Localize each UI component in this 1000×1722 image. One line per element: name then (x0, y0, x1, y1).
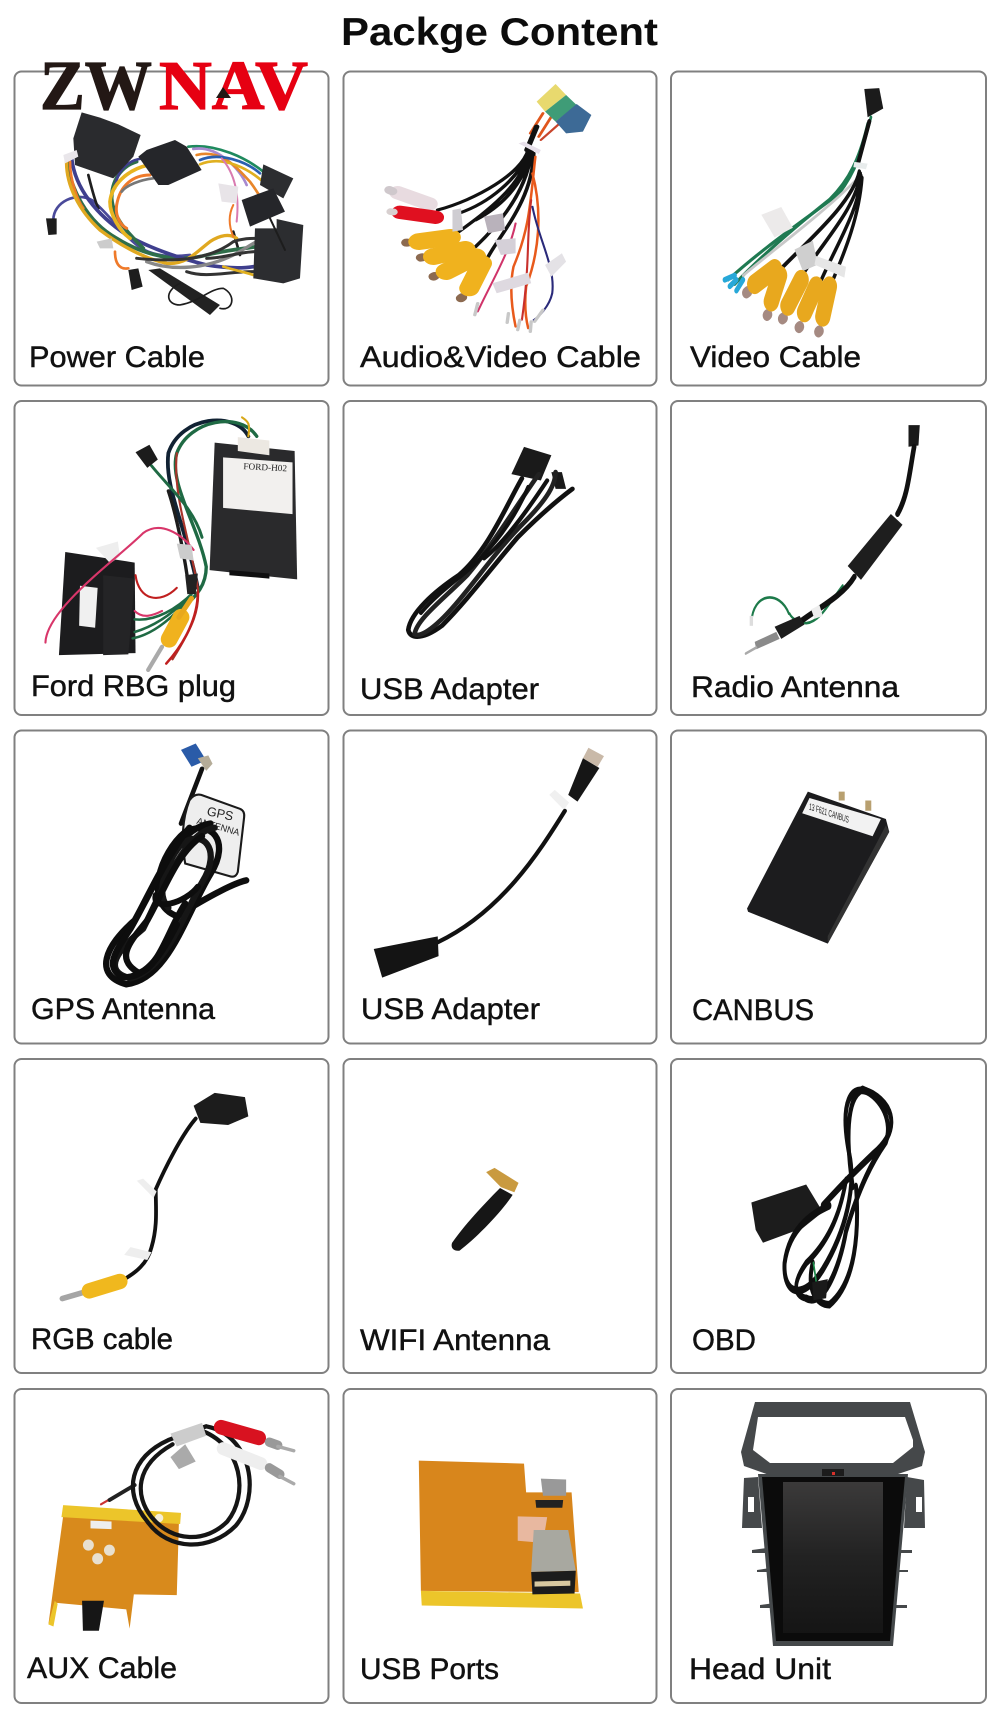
label: obd: OBD (692, 1324, 756, 1357)
panel: usb adapter short (344, 730, 656, 1044)
label: head unit: Head Unit (689, 1653, 832, 1686)
icon: canbus box (747, 792, 889, 944)
icon: gps antenna: GPS (206, 804, 235, 824)
icon: power cable harness (46, 112, 303, 315)
panel: usb adapter (344, 401, 656, 715)
icon: canbus box: 13 F621 CANBUS (809, 801, 849, 825)
title: Packge Content (341, 11, 658, 54)
icon: audio and video cable (389, 84, 591, 332)
icon: usb adapter cable (408, 447, 572, 637)
panel: rgb cable (14, 1059, 328, 1373)
icon: short usb adapter (374, 748, 604, 978)
icon: video cable (725, 88, 883, 332)
logo letters: NAV: NAV (159, 48, 308, 125)
panel: obd (671, 1059, 986, 1373)
icon: radio antenna (746, 425, 920, 654)
panel: gps antenna (14, 730, 328, 1044)
icon: gps antenna (106, 744, 246, 984)
label: usb ports: USB Ports (360, 1653, 499, 1686)
panel: wifi antenna (344, 1059, 656, 1373)
label: audio and video cable: Audio&Video Cable (360, 341, 641, 374)
panel: audio and video cable (344, 72, 656, 386)
icon: obd cable (751, 1089, 891, 1305)
label: power cable: Power Cable (29, 341, 205, 374)
icon: gps antenna: ANTENNA (196, 816, 242, 838)
label: ford rbg plug: Ford RBG plug (31, 670, 236, 703)
panel: power cable (14, 72, 328, 386)
label: usb adapter: USB Adapter (360, 673, 539, 706)
panel: aux cable (14, 1389, 328, 1703)
label: radio antenna: Radio Antenna (691, 671, 899, 704)
panel: radio antenna (671, 401, 986, 715)
logo letters: ZW: ZW (40, 48, 152, 125)
icon: ford rbg plug: FORD-H02 (243, 462, 288, 474)
panel: usb ports (344, 1389, 656, 1703)
label: usb adapter short: USB Adapter (361, 993, 540, 1026)
logo detail: triangle in A (216, 87, 231, 98)
icon: usb ports board (419, 1461, 583, 1608)
icon: wifi antenna (452, 1168, 519, 1251)
label: canbus: CANBUS (692, 994, 814, 1027)
icon: aux cable and board (48, 1423, 294, 1631)
panel: head unit (671, 1389, 986, 1703)
label: video cable: Video Cable (690, 341, 861, 374)
logo: ZWNAV (40, 48, 308, 125)
icon: head unit (741, 1402, 925, 1646)
label: aux cable: AUX Cable (27, 1652, 177, 1685)
panel: canbus (671, 730, 986, 1044)
icon: rgb cable (62, 1093, 248, 1299)
icon: ford rbg plug (45, 417, 297, 670)
label: rgb cable: RGB cable (31, 1323, 173, 1356)
label: gps antenna: GPS Antenna (31, 993, 215, 1026)
panel: video cable (671, 72, 986, 386)
panel: ford rbg plug (14, 401, 328, 715)
label: wifi antenna: WIFI Antenna (360, 1324, 550, 1357)
